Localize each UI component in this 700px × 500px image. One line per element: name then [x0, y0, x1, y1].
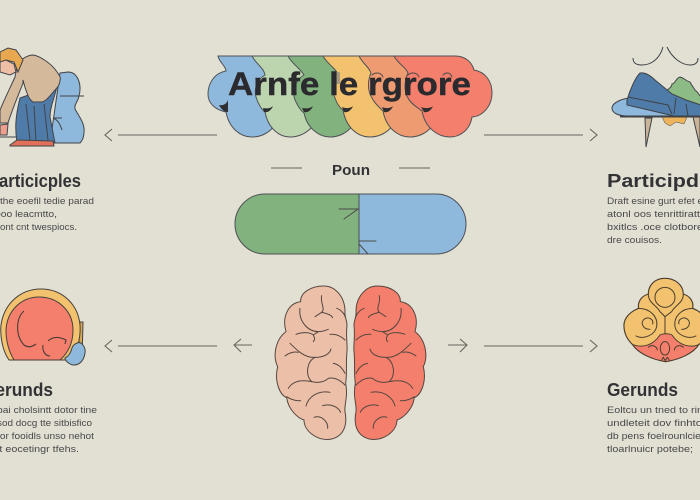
panel: participles left: ont cnt twespiocs.	[0, 222, 77, 233]
panel: gerunds right: tloarlnuicr potebe;	[607, 444, 693, 455]
panel: participles left	[0, 171, 94, 233]
lobe: yellow	[323, 56, 410, 137]
subheading with rules: Poun	[332, 162, 370, 179]
panel: gerunds right	[607, 380, 700, 455]
icon: left brain hemisphere	[275, 286, 347, 439]
panel: participles left: the eoefil tedie parad	[0, 196, 94, 207]
panel: gerunds right: Gerunds	[607, 380, 678, 400]
lobe: orange	[359, 56, 450, 137]
icon: yellow brain cross-section	[624, 278, 700, 362]
lobe: green	[288, 56, 370, 137]
small dark marks	[219, 100, 433, 112]
icon: round figure	[1, 289, 85, 365]
lobe: red	[394, 56, 492, 137]
pill: noun split	[235, 194, 466, 254]
small swirl marks	[372, 73, 452, 77]
title banner	[208, 56, 492, 137]
panel: gerunds left	[0, 380, 97, 455]
arrow: top right	[484, 129, 597, 141]
panel: participles right: Draft esine gurt efet e	[607, 196, 700, 207]
lobe: blue	[208, 56, 290, 137]
arrow: small right	[448, 339, 467, 352]
icon: right brain hemisphere	[354, 286, 426, 439]
lobe: light green	[252, 56, 330, 137]
panel: gerunds right: Eoltcu un tned to rin	[607, 405, 700, 416]
arrow: lower left	[105, 340, 217, 352]
panel: participles right: bxitlcs .oce clotbore	[607, 222, 700, 233]
title text: Arnfe le rgrore	[228, 66, 471, 102]
panel: participles right: atonl oos tenrittirattt	[607, 209, 700, 220]
panel: participles right	[607, 171, 700, 246]
panel: gerunds right: db pens foelrounlcie	[607, 431, 700, 442]
icon: person bending	[0, 48, 84, 146]
arrow: top left	[105, 129, 217, 141]
panel: participles right: dre couisos.	[607, 235, 662, 246]
panel: participles right: Participdi	[607, 171, 700, 191]
arrow: lower right	[484, 340, 597, 352]
icon: hat on table	[612, 47, 700, 147]
arrow: small left	[234, 339, 252, 352]
panel: gerunds right: undleteit dov finhto	[607, 418, 700, 429]
